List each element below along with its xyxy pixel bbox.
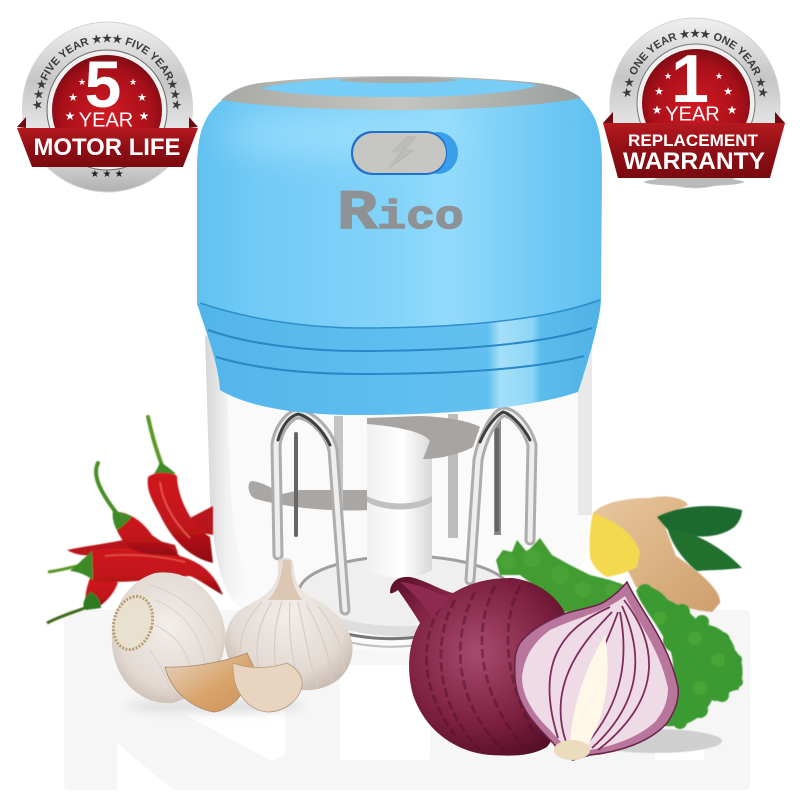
shadow under ribbon bbox=[644, 178, 744, 186]
garlic bulb left bbox=[108, 572, 225, 703]
jar base bbox=[299, 556, 511, 647]
small stars: ★ bbox=[78, 77, 86, 87]
curved text: ★★★FIVE YEAR ★★★ FIVE YEAR★★★ bbox=[32, 34, 182, 110]
top grey rim bbox=[221, 76, 581, 110]
silver disc bbox=[610, 18, 780, 188]
onion root bbox=[554, 740, 590, 760]
warranty text: WARRANTY bbox=[623, 148, 765, 175]
small stars: ★ bbox=[715, 71, 723, 81]
ginger cut face bbox=[590, 513, 640, 577]
jar right wall highlight bbox=[578, 345, 592, 515]
product: transparent jar bbox=[205, 330, 592, 652]
small stars: ★ bbox=[139, 109, 149, 123]
lid lower bands bbox=[197, 298, 601, 415]
small stars: ★ bbox=[65, 109, 75, 123]
product: back metal rods bbox=[334, 414, 501, 538]
product: lower blade bbox=[249, 481, 372, 511]
small stars: ★ bbox=[129, 77, 137, 87]
lower small chilli bbox=[47, 578, 118, 623]
product: white centre column bbox=[367, 424, 432, 578]
brand logo: Rico bbox=[337, 182, 464, 245]
garlic clove right bbox=[233, 663, 302, 712]
small stars: ★ bbox=[664, 71, 672, 81]
faint watermark at the bottom bbox=[64, 610, 750, 790]
red centre bbox=[637, 44, 755, 162]
soft shadow bbox=[125, 699, 305, 713]
year label: YEAR bbox=[665, 104, 720, 126]
food: coriander sprig bbox=[496, 538, 630, 612]
badge: 1 year replacement warranty bbox=[603, 18, 785, 188]
food: red chillies bbox=[47, 417, 223, 623]
bottom stars: ★ ★ ★ bbox=[90, 169, 124, 180]
small stars: ★ bbox=[727, 103, 737, 117]
band groove 3 bbox=[216, 356, 584, 374]
small stars: ★ bbox=[723, 86, 733, 98]
icon: lightning bolt bbox=[388, 136, 416, 169]
back chilli bbox=[67, 506, 213, 556]
product: upper blade bbox=[367, 416, 480, 459]
lid highlight bbox=[220, 117, 460, 153]
long horizontal chilli bbox=[48, 549, 223, 595]
outer skin bbox=[515, 582, 678, 760]
food: ginger bbox=[590, 496, 720, 612]
cast shadow bbox=[588, 729, 722, 753]
big one: 1 bbox=[671, 41, 709, 117]
top cap sliver bbox=[340, 77, 456, 83]
silver disc bbox=[22, 22, 192, 192]
badge: 5 year motor life bbox=[17, 22, 198, 192]
product: metal arch right bbox=[470, 412, 532, 580]
ledge line bbox=[367, 496, 432, 510]
big five: 5 bbox=[85, 47, 121, 121]
onion neck shine bbox=[400, 582, 450, 618]
band groove 1 bbox=[200, 300, 600, 328]
inner flesh bbox=[522, 596, 668, 750]
onion rings bbox=[549, 600, 649, 750]
replacement text: REPLACEMENT bbox=[628, 131, 759, 150]
curved chilli bbox=[96, 463, 180, 556]
food: parsley sprig bbox=[588, 584, 743, 753]
year label: YEAR bbox=[79, 110, 133, 132]
onion core bbox=[570, 635, 608, 745]
ribbon bbox=[603, 112, 785, 123]
food: whole red onion bbox=[390, 577, 573, 756]
upright chilli bbox=[148, 417, 213, 563]
product: metal arch left bbox=[276, 414, 345, 610]
ribbon text: MOTOR LIFE bbox=[34, 134, 180, 161]
ribbon bbox=[17, 117, 198, 128]
small stars bbox=[652, 71, 737, 117]
small stars: ★ bbox=[652, 103, 662, 117]
lid dome bbox=[197, 88, 602, 345]
food: green leaves bbox=[657, 506, 742, 571]
top inset bbox=[261, 78, 538, 97]
food: cut red onion bbox=[515, 582, 678, 760]
icon: power switch bbox=[351, 131, 458, 175]
food: garlic bulbs bbox=[108, 558, 353, 713]
red centre bbox=[47, 50, 167, 170]
small stars: ★ bbox=[137, 92, 147, 104]
jar left wall highlight bbox=[205, 335, 250, 600]
garlic bulb right bbox=[225, 558, 353, 691]
onion stripes bbox=[426, 586, 535, 752]
garlic clove left bbox=[165, 653, 255, 712]
product: blue lid bbox=[197, 76, 602, 415]
small stars bbox=[65, 77, 149, 123]
small stars: ★ bbox=[68, 92, 78, 104]
band groove 2 bbox=[208, 328, 592, 351]
small stars: ★ bbox=[654, 86, 664, 98]
